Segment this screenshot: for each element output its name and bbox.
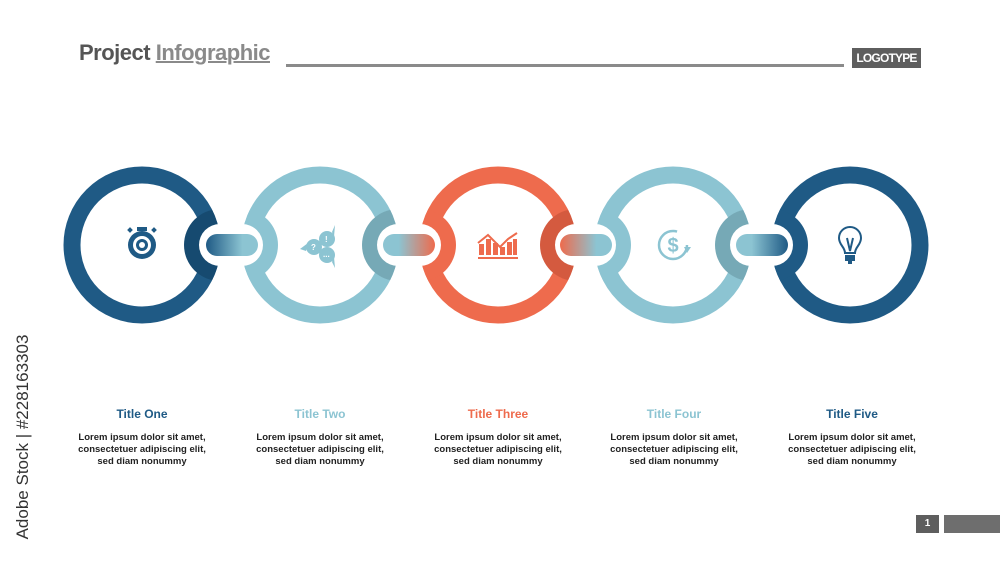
text: title five: Lorem ipsum dolor sit amet,	[788, 432, 916, 443]
icon: bar chart	[478, 233, 518, 259]
footer bar	[944, 515, 1000, 533]
text: title four: Lorem ipsum dolor sit amet,	[610, 432, 738, 443]
text: title three	[434, 407, 562, 467]
text: title three: sed diam nonummy	[453, 456, 543, 467]
logotype: LOGOTYPE	[856, 51, 917, 65]
text: title four	[610, 407, 738, 467]
icon: stopwatch gear	[127, 227, 157, 259]
text: title one: Title One	[116, 407, 168, 421]
text: title two: Lorem ipsum dolor sit amet,	[256, 432, 384, 443]
text: title four: consectetuer adipiscing elit,	[610, 444, 738, 455]
circle 2	[244, 166, 396, 324]
circle 2: ...	[323, 250, 330, 259]
icon: dollar cycle	[659, 231, 691, 259]
text: title one: sed diam nonummy	[97, 456, 187, 467]
text: title one	[78, 407, 206, 467]
text: title one: Lorem ipsum dolor sit amet,	[78, 432, 206, 443]
page number: 1	[925, 518, 930, 529]
text: title three: Title Three	[468, 407, 528, 421]
text: title five: Title Five	[826, 407, 878, 421]
watermark text: Adobe Stock | #228163303	[13, 335, 32, 539]
text: title five: sed diam nonummy	[807, 456, 897, 467]
icon: light bulb	[839, 227, 861, 253]
circle 1	[72, 175, 256, 315]
circle 2: ?	[311, 243, 316, 252]
icon: dollar cycle: $	[667, 235, 679, 257]
chain diagram	[64, 166, 928, 324]
text: title four: Title Four	[647, 407, 701, 421]
page number	[916, 515, 939, 533]
logotype	[852, 48, 921, 68]
text: title one: consectetuer adipiscing elit,	[78, 444, 206, 455]
circle 3	[422, 166, 574, 324]
text: title two	[256, 407, 384, 467]
circle 5	[736, 175, 920, 315]
text: title four: sed diam nonummy	[629, 456, 719, 467]
connector pills	[206, 234, 788, 256]
text: title two: consectetuer adipiscing elit,	[256, 444, 384, 455]
text: title two: sed diam nonummy	[275, 456, 365, 467]
icon: speech bubbles	[300, 225, 335, 268]
header line	[286, 64, 844, 67]
text: title five	[788, 407, 916, 467]
text: title three: consectetuer adipiscing elit,	[434, 444, 562, 455]
title: Project Infographic	[79, 40, 270, 65]
circle 4	[597, 166, 749, 324]
text: title three: Lorem ipsum dolor sit amet,	[434, 432, 562, 443]
circle 2: !	[325, 235, 328, 244]
text: title five: consectetuer adipiscing elit,	[788, 444, 916, 455]
text: title two: Title Two	[295, 407, 345, 421]
